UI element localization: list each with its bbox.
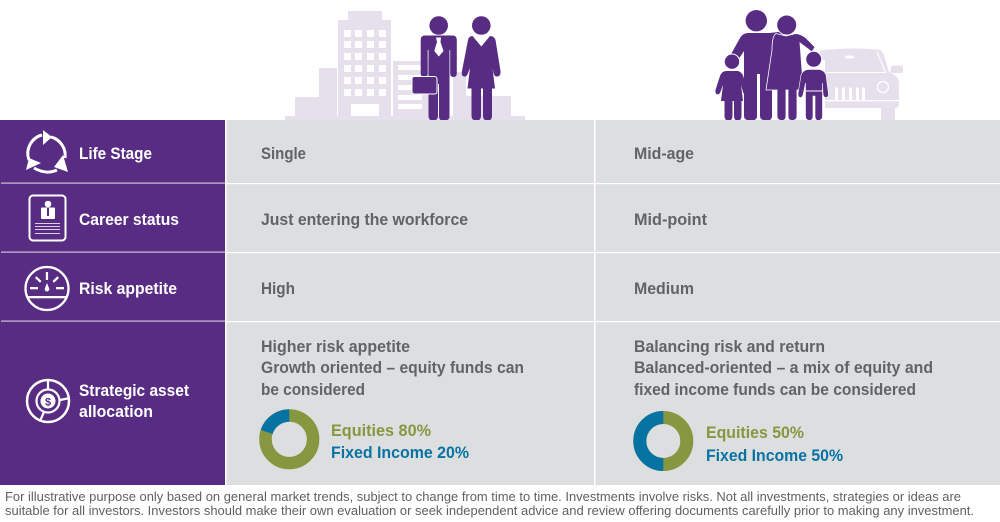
text: single allocation description <box>261 337 524 399</box>
text: mid-age allocation description: fixed income funds can be considered <box>634 380 916 399</box>
value: Just entering the workforce: Just entering the workforce <box>261 210 468 229</box>
legend: equities and fixed income 80/20 <box>331 421 469 462</box>
woman in dress <box>462 16 501 121</box>
legend: equities and fixed income 50/50: Equities 50% <box>706 423 804 442</box>
row: strategic asset allocation <box>27 337 933 465</box>
icon: risk gauge <box>26 267 68 310</box>
footnote disclaimer: suitable for all investors. Investors should make their own evaluation or seek independent advice and review offering documents carefully prior to making any investment. <box>5 503 974 518</box>
donut chart: equities 50, fixed income 50 <box>640 418 687 464</box>
text: single allocation description: be considered <box>261 380 365 399</box>
value: Mid-point: Mid-point <box>634 210 707 229</box>
mother <box>766 15 815 120</box>
daughter <box>715 54 748 120</box>
value: High: High <box>261 279 295 298</box>
label: Strategic asset allocation <box>79 381 189 421</box>
footnote disclaimer <box>5 489 974 518</box>
value: Mid-age: Mid-age <box>634 144 694 163</box>
icon: allocation dial <box>27 380 70 422</box>
text: mid-age allocation description: Balanced-oriented – a mix of equity and <box>634 358 933 377</box>
icon: resume card <box>30 196 66 240</box>
row: risk appetite <box>26 267 694 310</box>
label: Strategic asset allocation: allocation <box>79 402 153 421</box>
icon: cycle arrows <box>26 130 68 172</box>
text: mid-age allocation description <box>634 337 933 399</box>
father <box>729 10 784 121</box>
text: single allocation description: Growth oriented – equity funds can <box>261 358 524 377</box>
son <box>798 51 828 120</box>
row: career status <box>30 196 707 240</box>
illustration: city building with business couple <box>285 11 525 120</box>
label: Strategic asset allocation: Strategic asset <box>79 381 189 400</box>
legend: equities and fixed income 50/50: Fixed Income 50% <box>706 446 843 465</box>
row: life stage <box>26 130 694 172</box>
illustration: family with car <box>715 10 903 121</box>
icon: allocation dial: $ <box>45 396 51 408</box>
donut chart: equities 80, fixed income 20 <box>266 416 313 463</box>
label: Career status: Career status <box>79 210 179 229</box>
cityscape background <box>285 11 525 120</box>
value: Medium: Medium <box>634 279 694 298</box>
legend: equities and fixed income 80/20: Equities 80% <box>331 421 431 440</box>
label: Risk appetite: Risk appetite <box>79 279 177 298</box>
text: mid-age allocation description: Balancing risk and return <box>634 337 825 356</box>
car <box>820 48 903 120</box>
man in suit with briefcase <box>412 16 457 121</box>
text: single allocation description: Higher risk appetite <box>261 337 410 356</box>
value: Single: Single <box>261 144 306 163</box>
legend: equities and fixed income 50/50 <box>706 423 843 465</box>
table grey background <box>225 120 1000 485</box>
left purple panel <box>0 120 225 485</box>
legend: equities and fixed income 80/20: Fixed Income 20% <box>331 443 469 462</box>
label: Life Stage: Life Stage <box>79 144 152 163</box>
footnote disclaimer: For illustrative purpose only based on general market trends, subject to change from time to time. Investments involve risks. Not all investments, strategies or ideas are <box>5 489 961 504</box>
